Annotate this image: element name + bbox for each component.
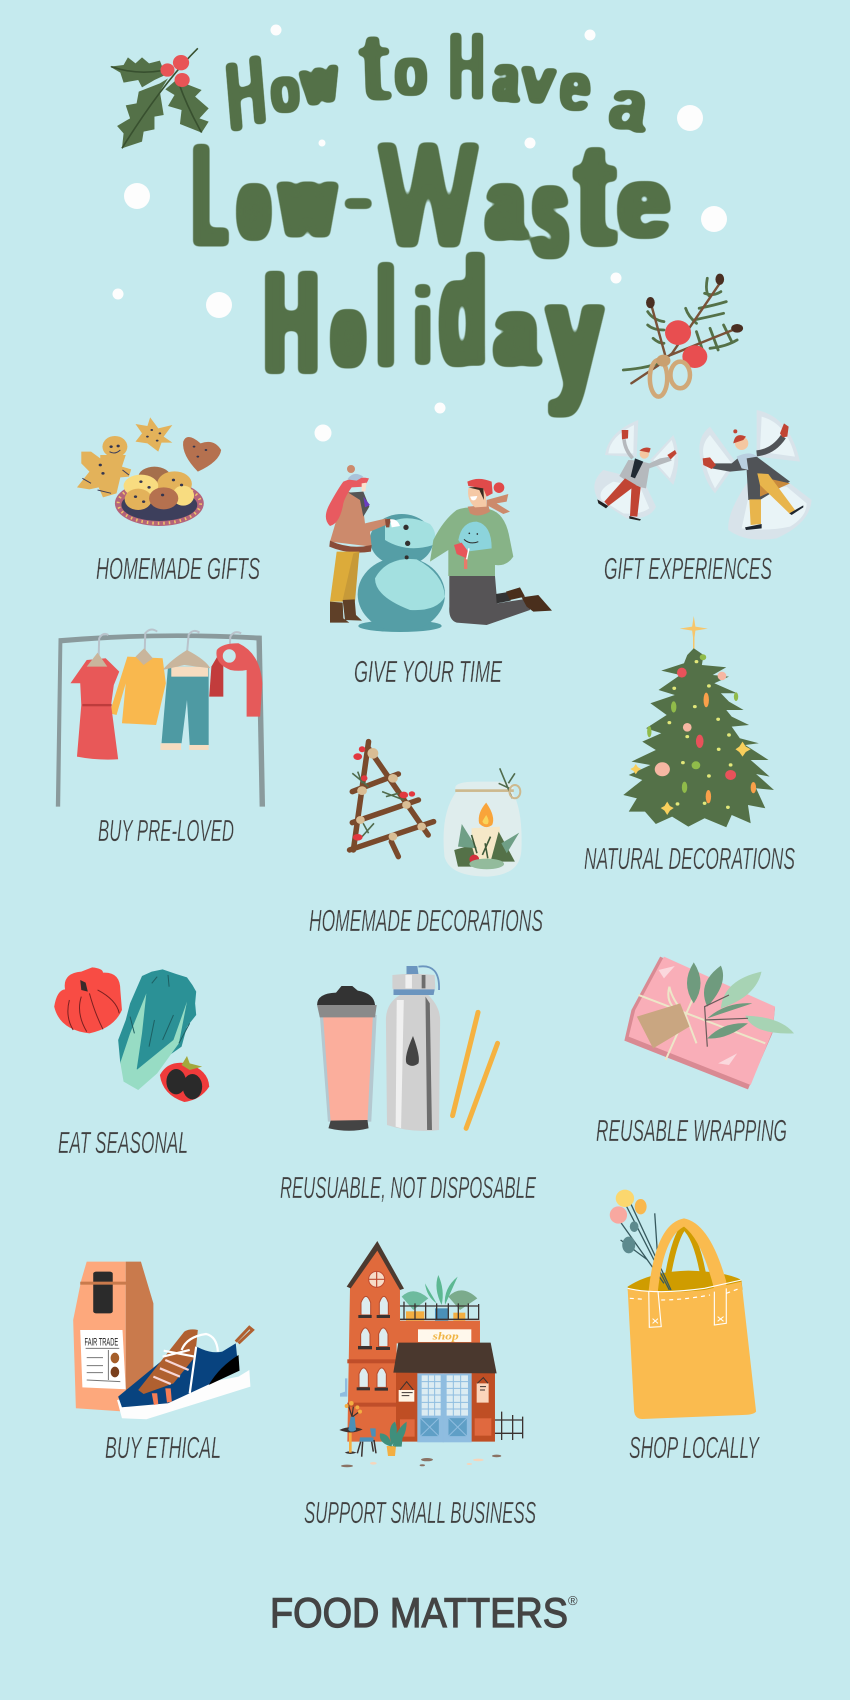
label: homemade gifts: HOMEMADE GIFTS xyxy=(96,551,260,586)
icon: twig tree and candle jar xyxy=(350,742,522,877)
panel: support small business xyxy=(304,1241,536,1530)
title line: Holiday: a xyxy=(495,277,539,385)
title line: How to Have a: o xyxy=(260,56,304,128)
panel: shop locally xyxy=(610,1190,760,1465)
title line: Holiday: H xyxy=(264,241,318,404)
title line: Holiday: i xyxy=(416,266,429,386)
icon: tote bag with flowers xyxy=(610,1190,756,1419)
title line: Low-Waste: o xyxy=(238,148,269,260)
title line: Holiday: l xyxy=(378,238,393,396)
title line: Holiday: d xyxy=(440,226,486,397)
icon: snow angels xyxy=(594,410,812,540)
title line: Low-Waste: s xyxy=(533,140,567,285)
icon: christmas tree xyxy=(623,616,774,827)
icon: clothes rack xyxy=(56,630,265,807)
panel: homemade gifts xyxy=(77,417,260,586)
title line: Holiday xyxy=(264,226,602,417)
icon: couple building a snowman xyxy=(326,465,552,632)
icon: fair trade coffee and sneaker xyxy=(73,1262,253,1419)
panel: reusable, not disposable xyxy=(280,966,536,1205)
title line: Low-Waste: t xyxy=(576,112,615,275)
logo: food matters: ® xyxy=(568,1593,578,1608)
title line: How to Have a: t xyxy=(357,14,390,120)
snowflakes xyxy=(112,24,727,442)
title: y xyxy=(547,249,602,417)
title line: How to Have a: a xyxy=(604,63,660,144)
panel: give your time xyxy=(326,465,552,689)
icon: wrapped gift with leaves xyxy=(624,957,794,1089)
panel: buy ethical xyxy=(73,1262,253,1465)
label: buy ethical: BUY ETHICAL xyxy=(105,1430,221,1465)
title line: Low-Waste: L xyxy=(194,115,226,276)
panel: natural decorations xyxy=(584,616,795,876)
label: support small business: SUPPORT SMALL BUSINESS xyxy=(304,1495,536,1530)
panel: homemade decorations xyxy=(309,742,543,938)
title line: How to Have a: o xyxy=(393,35,427,110)
title line: How to Have a: e xyxy=(556,48,601,124)
icon: pine and berry bouquet xyxy=(623,274,743,397)
title line: Holiday: o xyxy=(332,273,364,388)
text: shop sign: shop xyxy=(431,1331,459,1342)
panel: reusable wrapping xyxy=(596,957,794,1148)
title line: Low-Waste: e xyxy=(618,146,669,258)
title line: How to Have a: H xyxy=(450,13,483,119)
title line: Low-Waste: a xyxy=(487,148,525,260)
label: buy pre-loved: BUY PRE-LOVED xyxy=(98,813,234,848)
panel: buy pre-loved xyxy=(56,630,265,848)
icon: pumpkin, chard and tomato xyxy=(54,967,209,1102)
icon: cookies xyxy=(77,417,221,526)
title line: How to Have a: H xyxy=(208,42,272,152)
title line: How to Have a: v xyxy=(519,43,560,117)
title xyxy=(194,13,669,417)
icon: fair trade coffee and sneaker: FAIR TRADE xyxy=(85,1336,118,1348)
title line: Low-Waste: w xyxy=(280,146,335,257)
title line: How to Have a: w xyxy=(291,45,342,120)
title line: How to Have a xyxy=(208,13,660,152)
icon: holly sprig xyxy=(110,48,209,148)
label: eat seasonal: EAT SEASONAL xyxy=(58,1125,188,1160)
panel: eat seasonal xyxy=(54,967,209,1160)
icon: brick shop building xyxy=(339,1241,523,1467)
logo: food matters: FOOD MATTERS xyxy=(270,1589,568,1636)
title line: How to Have a: a xyxy=(492,40,524,115)
title line: Low-Waste: - xyxy=(346,140,371,251)
title line: Low-Waste xyxy=(194,112,669,285)
label: give your time: GIVE YOUR TIME xyxy=(354,654,502,689)
icon: tumbler, bottle and straws xyxy=(317,966,498,1131)
label: reusable, not disposable: REUSUABLE, NOT DISPOSABLE xyxy=(280,1170,536,1205)
label: homemade decorations: HOMEMADE DECORATIONS xyxy=(309,903,543,938)
title line: Low-Waste: W xyxy=(381,113,475,278)
panel: gift experiences xyxy=(594,410,812,586)
